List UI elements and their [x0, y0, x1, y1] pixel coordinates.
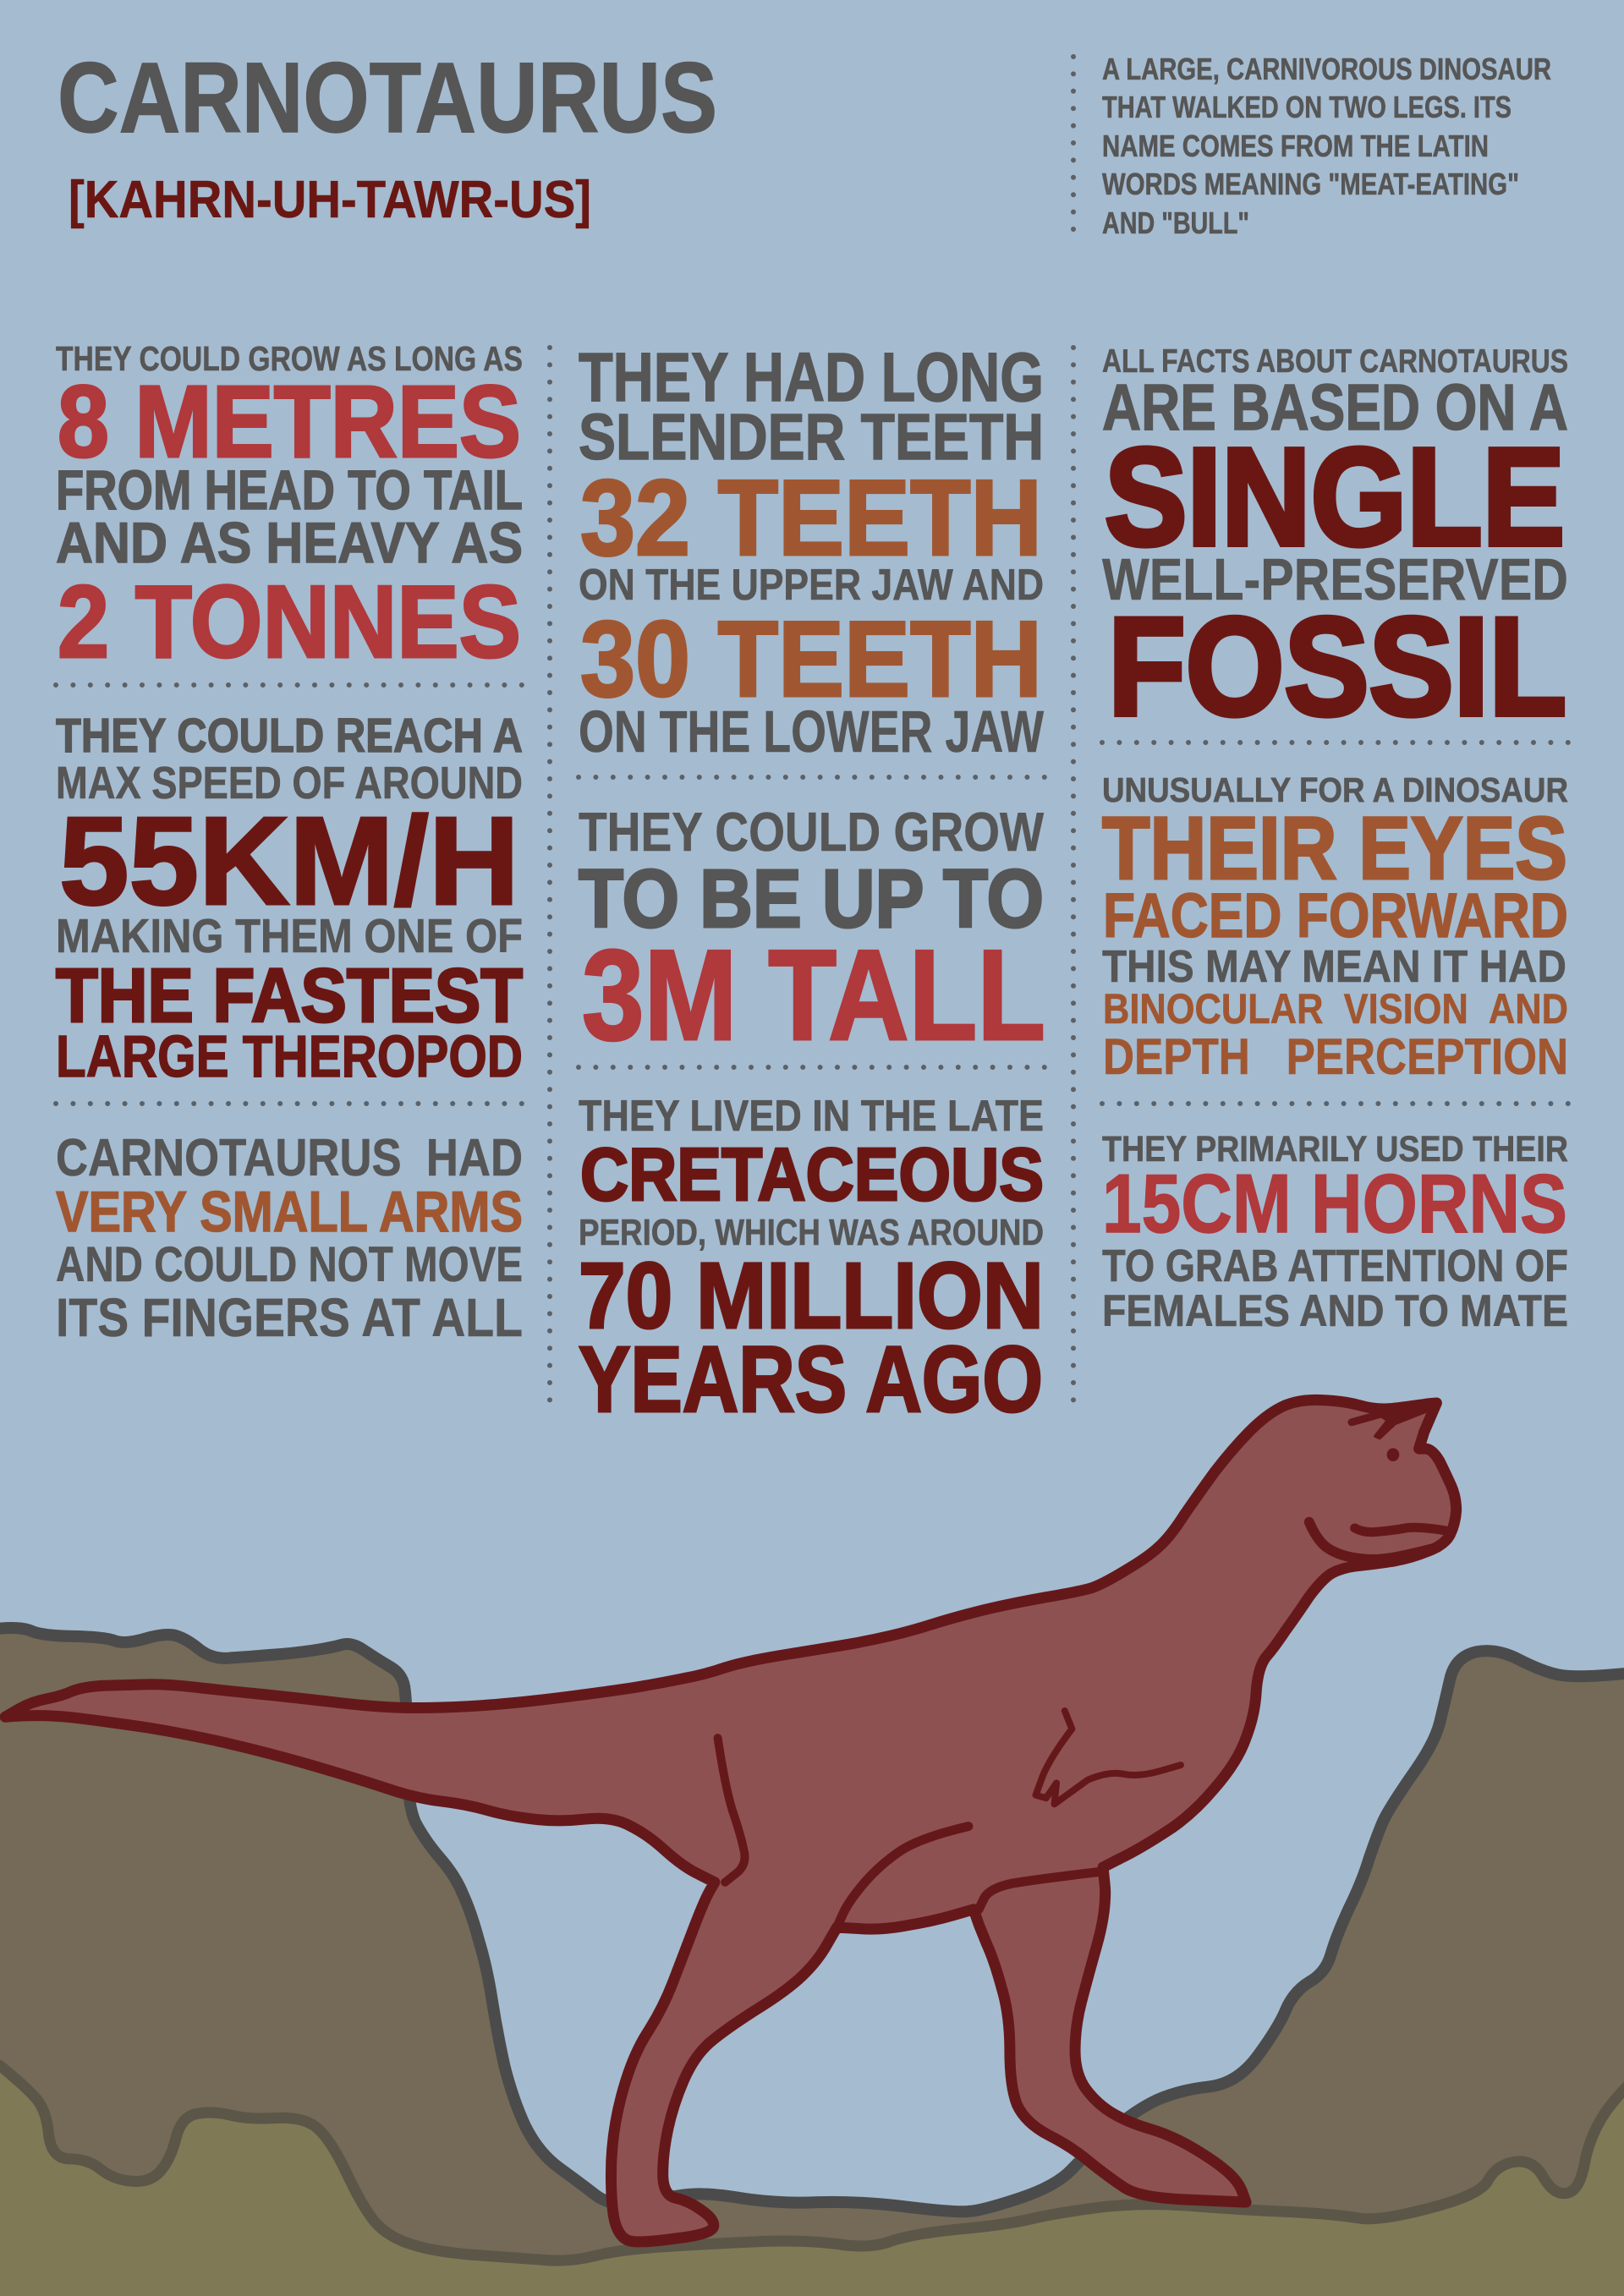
fact: speed [56, 709, 523, 1089]
intro text block: WORDS MEANING "MEAT-EATING" [1102, 167, 1519, 201]
pronunciation: [KAHRN-UH-TAWR-US] [69, 171, 591, 229]
fact: era: YEARS AGO [579, 1328, 1043, 1432]
intro divider dots [1071, 57, 1076, 233]
fact: era: PERIOD, WHICH WAS AROUND [579, 1212, 1044, 1253]
rocks [0, 1627, 1624, 2296]
fact: speed: THEY COULD REACH A [56, 709, 523, 763]
fact: speed: MAKING THEM ONE OF [56, 909, 523, 963]
fact: teeth: ON THE LOWER JAW [579, 699, 1044, 764]
column 2 facts [579, 339, 1045, 1432]
fact: eyes: THEIR EYES [1102, 799, 1567, 898]
dinosaur body [5, 1400, 1457, 2242]
fact: length and weight: 2 TONNES [58, 564, 521, 679]
fact: length and weight: 8 METRES [58, 364, 521, 479]
fact: height [579, 801, 1045, 1067]
fact: era [579, 1092, 1044, 1432]
dinosaur [5, 1400, 1457, 2242]
fact: arms [56, 1129, 523, 1348]
fact: length and weight: AND AS HEAVY AS [56, 511, 523, 575]
horn [1375, 1403, 1436, 1438]
fact: horns [1102, 1129, 1568, 1336]
fact: length and weight: FROM HEAD TO TAIL [56, 458, 523, 521]
fact: arms: ITS FINGERS AT ALL [56, 1287, 523, 1348]
fact: horns: FEMALES AND TO MATE [1102, 1286, 1568, 1336]
fact: eyes: UNUSUALLY FOR A DINOSAUR [1102, 770, 1568, 809]
column 3 facts [1102, 343, 1569, 1336]
fact: era: THEY LIVED IN THE LATE [579, 1092, 1044, 1141]
intro text block [1102, 52, 1551, 240]
fact: height: 3M TALL [582, 923, 1045, 1067]
fact: height: TO BE UP TO [579, 852, 1044, 945]
fact: era: 70 MILLION [579, 1244, 1044, 1348]
fact: teeth: THEY HAD LONG [579, 339, 1044, 416]
fact: speed: MAX SPEED OF AROUND [56, 758, 523, 808]
intro text block: NAME COMES FROM THE LATIN [1102, 129, 1489, 163]
fact: arms: VERY SMALL ARMS [56, 1180, 523, 1244]
fact: single fossil [1102, 343, 1568, 744]
fact: eyes: BINOCULAR VISION AND [1103, 985, 1568, 1033]
fact: length and weight [56, 339, 523, 679]
fact: arms: CARNOTAURUS HAD [56, 1129, 523, 1187]
fact: era: CRETACEOUS [580, 1132, 1044, 1216]
fact: arms: AND COULD NOT MOVE [56, 1237, 523, 1292]
fact: horns: THEY PRIMARILY USED THEIR [1102, 1129, 1568, 1170]
fact: single fossil: SINGLE [1105, 419, 1565, 574]
fact: teeth [579, 339, 1044, 764]
column divider dots [547, 348, 552, 1411]
fact: single fossil: FOSSIL [1108, 589, 1566, 744]
fact: eyes: THIS MAY MEAN IT HAD [1102, 941, 1566, 992]
dinosaur inner lines [718, 1414, 1445, 1927]
landscape and dinosaur illustration [0, 1400, 1624, 2296]
fact: eyes [1102, 770, 1568, 1085]
fact: height: THEY COULD GROW [579, 801, 1045, 863]
intro text block: AND "BULL" [1102, 205, 1249, 240]
title: CARNOTAURUS [58, 42, 717, 154]
fact: teeth: 30 TEETH [580, 599, 1042, 719]
fact: teeth: ON THE UPPER JAW AND [579, 561, 1044, 610]
ground [0, 2057, 1624, 2296]
fact: speed: LARGE THEROPOD [56, 1023, 523, 1089]
intro text block: THAT WALKED ON TWO LEGS. ITS [1102, 90, 1512, 124]
fact: speed: THE FASTEST [56, 954, 523, 1038]
column 1 facts [56, 339, 524, 1348]
eye [1387, 1448, 1399, 1461]
fact: teeth: 32 TEETH [580, 458, 1042, 578]
fact: length and weight: THEY COULD GROW AS LONG AS [56, 339, 523, 378]
fact: teeth: SLENDER TEETH [579, 401, 1044, 474]
column divider dots [1071, 348, 1076, 1411]
fact: speed: 55KM/H [59, 792, 519, 931]
